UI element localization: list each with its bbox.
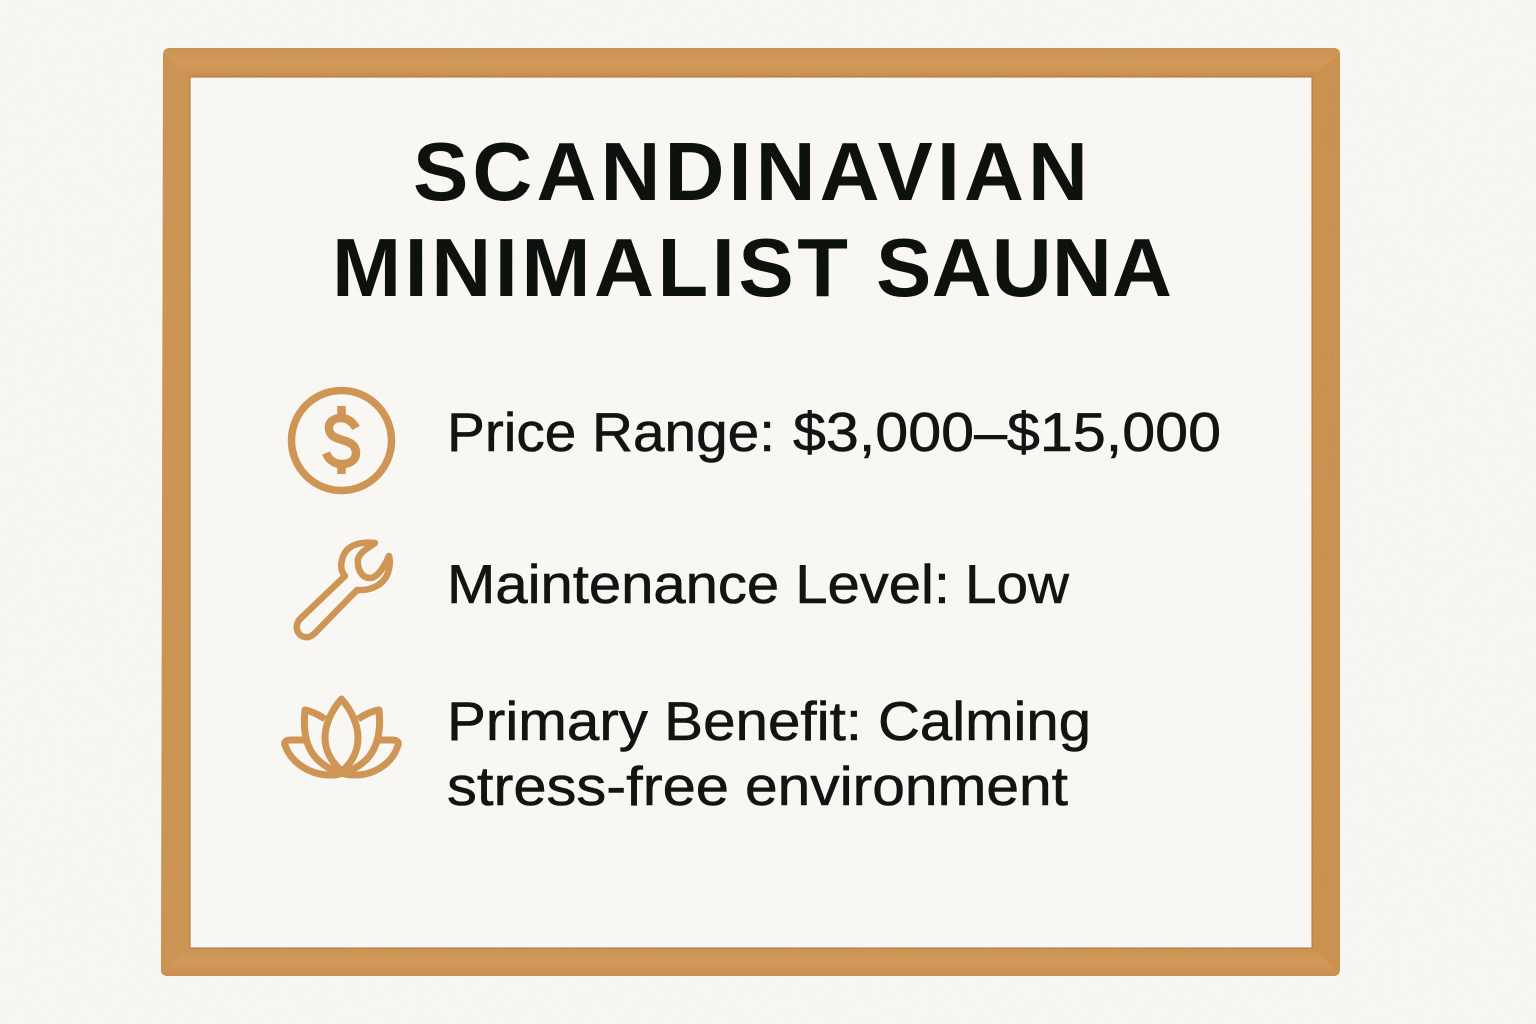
icon: wrench — [297, 543, 390, 637]
icon: dollar coin — [292, 390, 392, 490]
text: maintenance level: Maintenance Level: — [447, 553, 950, 615]
title: SAUNA — [876, 221, 1172, 314]
icon: lotus — [285, 699, 398, 775]
text: maintenance level: Low — [965, 553, 1069, 615]
title: SCANDINAVIAN — [413, 125, 1088, 218]
title — [332, 125, 1172, 314]
title: MINIMALIST — [332, 221, 848, 314]
text: primary benefit: environment — [745, 755, 1068, 817]
text: price range: Price Range: — [447, 401, 775, 463]
wooden frame — [160, 46, 1342, 978]
text: primary benefit: Calming — [878, 690, 1091, 752]
text: primary benefit: Primary Benefit: — [447, 690, 862, 752]
text: price range: $3,000–$15,000 — [793, 401, 1221, 463]
text: primary benefit: stress-free — [447, 755, 729, 817]
text: price range — [447, 401, 1221, 463]
text: primary benefit — [447, 690, 1091, 817]
infographic — [161, 48, 1340, 976]
